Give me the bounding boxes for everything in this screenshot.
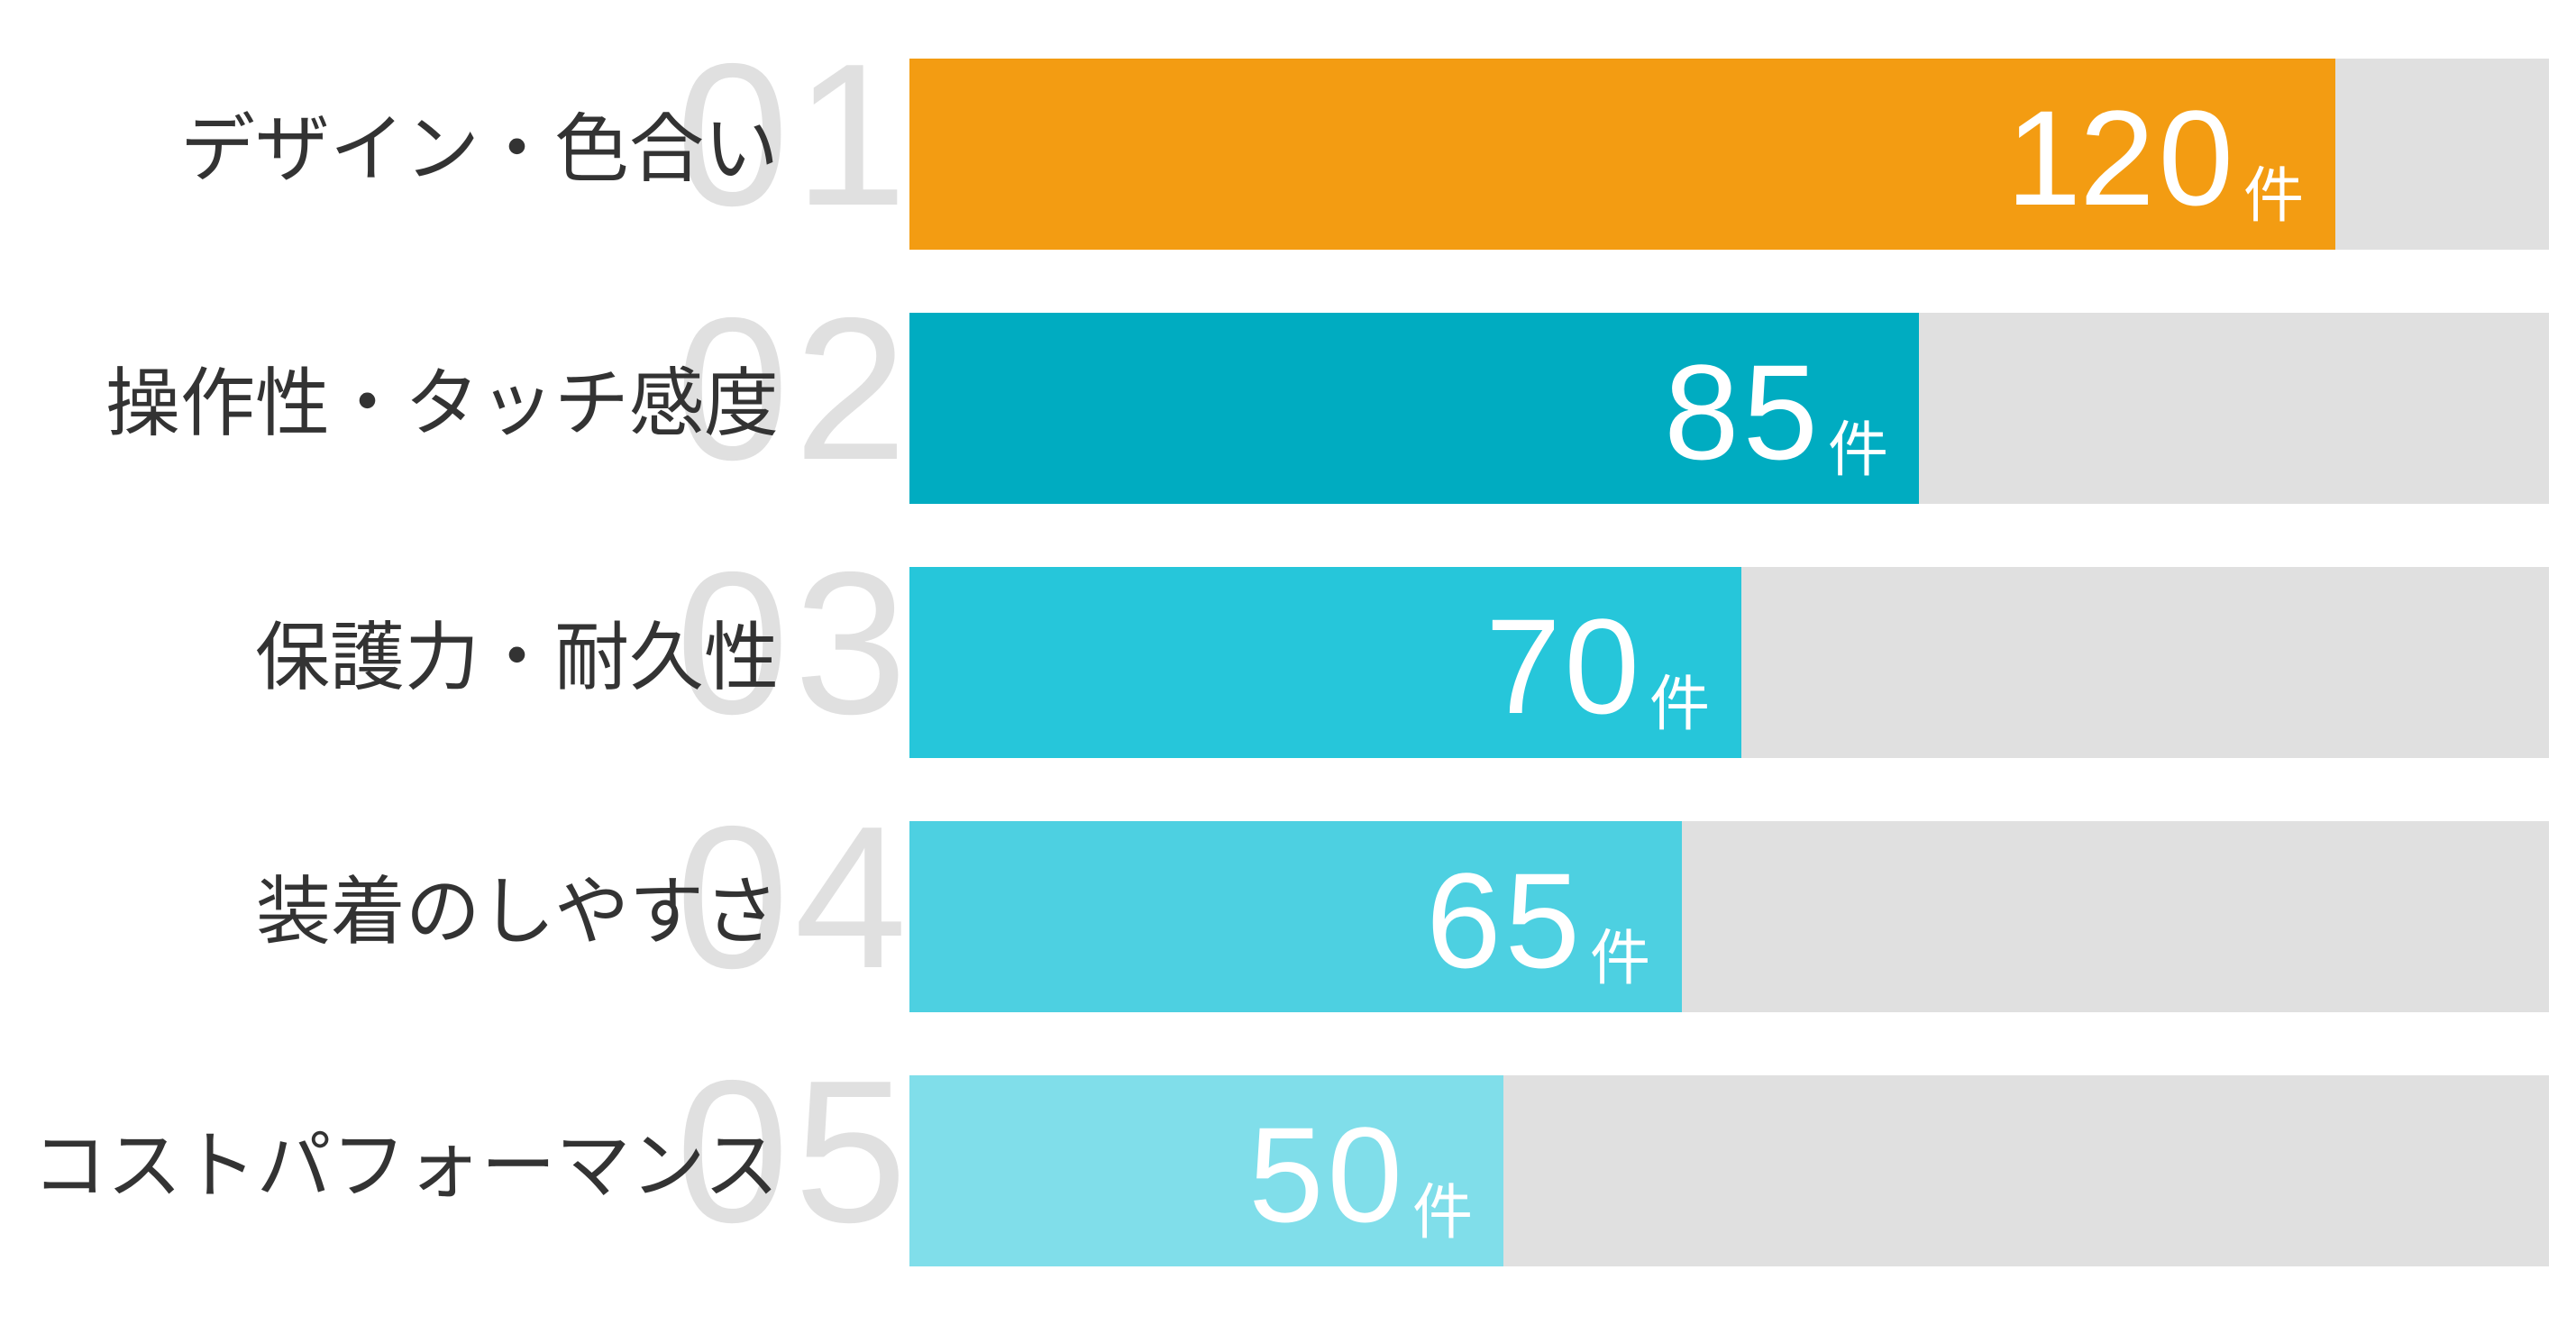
label: cost performance: コストパフォーマンス bbox=[32, 1124, 779, 1208]
row 2: operability and touch bbox=[105, 275, 2549, 504]
label: design and colour: デザイン・色合い bbox=[180, 107, 779, 191]
row 1: design and colour bbox=[180, 21, 2549, 250]
rank number 04: 04 bbox=[676, 783, 912, 1010]
unit: 件 bbox=[1828, 416, 1888, 484]
bar value 65 bbox=[909, 821, 1682, 1012]
unit: 件 bbox=[2243, 162, 2304, 230]
bar value 120 bbox=[909, 59, 2335, 250]
label: protection and durability: 保護力・耐久性 bbox=[255, 616, 779, 699]
rank number 01: 01 bbox=[676, 21, 912, 248]
value 50: 50 bbox=[1248, 1099, 1406, 1250]
rank number 03: 03 bbox=[676, 529, 912, 756]
value 70: 70 bbox=[1485, 590, 1643, 742]
bar value 50 bbox=[909, 1075, 1503, 1266]
bar value 70 bbox=[909, 567, 1741, 758]
unit: 件 bbox=[1649, 671, 1710, 738]
bar track 4 bbox=[909, 821, 2549, 1012]
rank number 02: 02 bbox=[676, 275, 912, 502]
value 65: 65 bbox=[1426, 845, 1584, 996]
bar value 85 bbox=[909, 313, 1919, 504]
value 85: 85 bbox=[1664, 336, 1822, 488]
unit: 件 bbox=[1412, 1179, 1473, 1247]
bar track 3 bbox=[909, 567, 2549, 758]
rank number 05: 05 bbox=[676, 1037, 912, 1265]
bar track 2 bbox=[909, 313, 2549, 504]
row 5: cost performance bbox=[32, 1037, 2549, 1266]
unit: 件 bbox=[1590, 925, 1650, 992]
label: ease of fitting: 装着のしやすさ bbox=[256, 870, 779, 954]
label: operability and touch: 操作性・タッチ感度 bbox=[105, 361, 779, 445]
bar track 5 bbox=[909, 1075, 2549, 1266]
row 4: ease of fitting bbox=[256, 783, 2549, 1012]
row 3: protection and durability bbox=[255, 529, 2549, 758]
bar track 1 bbox=[909, 59, 2549, 250]
value 120: 120 bbox=[2006, 82, 2237, 233]
